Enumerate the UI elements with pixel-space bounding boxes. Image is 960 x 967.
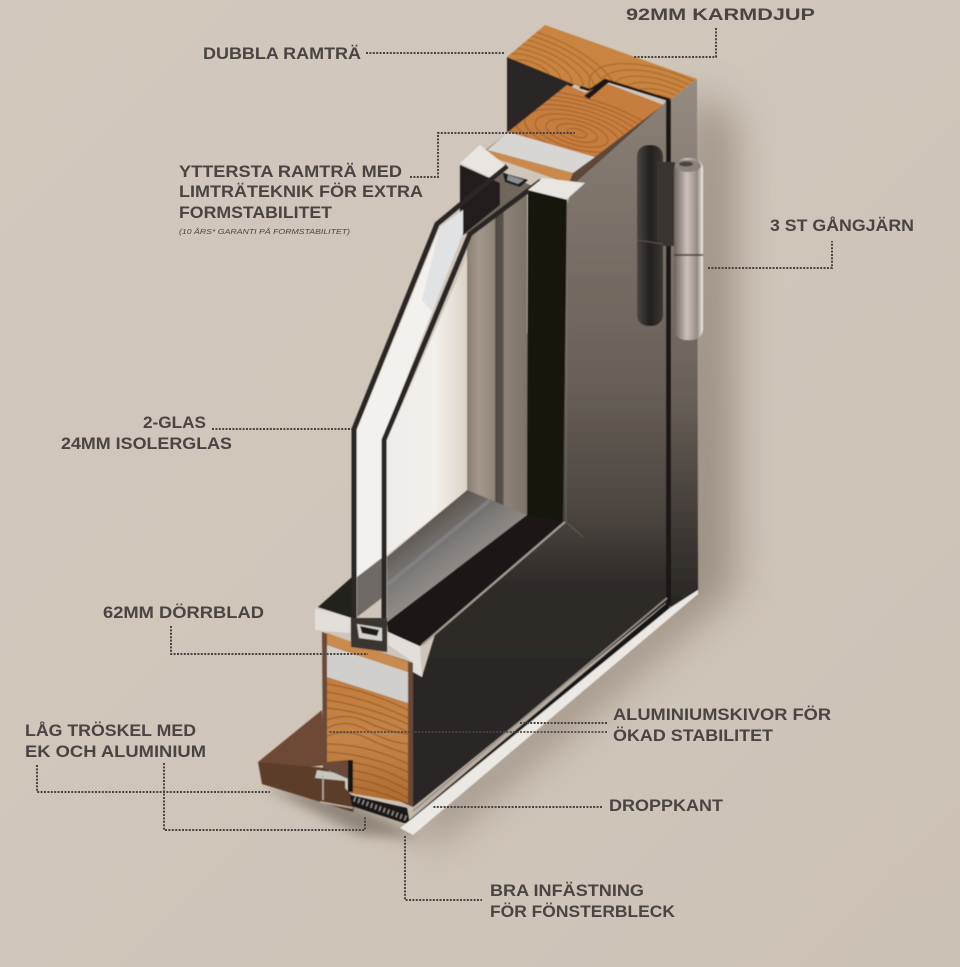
label: dubbla ramträ: DUBBLA RAMTRÄ [203, 45, 361, 63]
outer frame side [670, 79, 698, 608]
notch slot [584, 80, 609, 99]
door shadow [262, 90, 735, 840]
label: 92mm karmdjup [626, 6, 815, 57]
window jamb [467, 190, 527, 515]
white strip right [388, 632, 422, 677]
label: låg tröskel: LÅG TRÖSKEL MED [25, 721, 196, 740]
lower wood strip [485, 150, 573, 183]
door leaf top cross-section [460, 80, 664, 200]
sill ridge [387, 500, 490, 585]
white strip left [315, 608, 350, 633]
label: isolerglas: 24MM ISOLERGLAS [61, 435, 232, 453]
bottom glass spacer [351, 618, 387, 652]
insulation strip [487, 132, 595, 173]
top frame wood [506, 24, 698, 101]
label: aluminiumskivor: ALUMINIUMSKIVOR FÖR [613, 705, 831, 724]
label: dörrblad: 62MM DÖRRBLAD [103, 603, 264, 622]
window sill [387, 490, 527, 622]
reveal: black lower band [387, 515, 563, 646]
label: yttersta ramträ: LIMTRÄTEKNIK FÖR EXTRA [179, 182, 423, 201]
label: gångjärn: 3 ST GÅNGJÄRN [770, 216, 914, 235]
label: fönsterbleck: BRA INFÄSTNING [490, 882, 644, 900]
outer pane gap glass [357, 210, 463, 577]
top glass spacer [503, 173, 528, 187]
door leaf face [413, 100, 667, 807]
label: gångjärn [708, 216, 914, 268]
label: aluminiumskivor: ÖKAD STABILITET [613, 726, 773, 745]
dark left jamb at top [460, 165, 500, 235]
jamb at top between panes [463, 172, 532, 234]
inner pane glass [387, 257, 467, 555]
label: yttersta ramträ: (10 ÅRS* GARANTI PÅ FORMSTABILITET) [179, 227, 350, 236]
pane lines [354, 166, 541, 632]
label: isolerglas [61, 414, 352, 453]
label: yttersta ramträ: FORMSTABILITET [179, 204, 332, 222]
white strip right [528, 178, 585, 199]
label: låg tröskel [25, 721, 365, 830]
left dark sill [318, 577, 352, 618]
label: aluminiumskivor [328, 705, 831, 745]
label: yttersta ramträ: YTTERSTA RAMTRÄ MED [179, 163, 402, 181]
threshold [258, 710, 356, 812]
label: isolerglas: 2-GLAS [143, 414, 206, 432]
label: 92mm karmdjup: 92MM KARMDJUP [626, 6, 815, 24]
label: fönsterbleck: FÖR FÖNSTERBLECK [490, 902, 675, 921]
hinges [637, 145, 703, 340]
outer frame: dark inside [507, 57, 575, 135]
label: dörrblad [103, 603, 368, 654]
label: yttersta ramträ [179, 133, 575, 236]
label: fönsterbleck [405, 836, 675, 921]
reveal highlight [422, 522, 565, 645]
white strip left [460, 145, 505, 177]
drip edge aluminium [350, 590, 698, 835]
frame gap line [666, 100, 671, 606]
lower glass spacer [357, 557, 383, 617]
door leaf bottom cross-section [315, 608, 422, 807]
reveal: black vertical band [527, 190, 567, 522]
door illustration [257, 24, 704, 836]
label: låg tröskel: EK OCH ALUMINIUM [25, 743, 206, 761]
bevel on door face [566, 198, 583, 537]
label: droppkant: DROPPKANT [609, 797, 723, 815]
